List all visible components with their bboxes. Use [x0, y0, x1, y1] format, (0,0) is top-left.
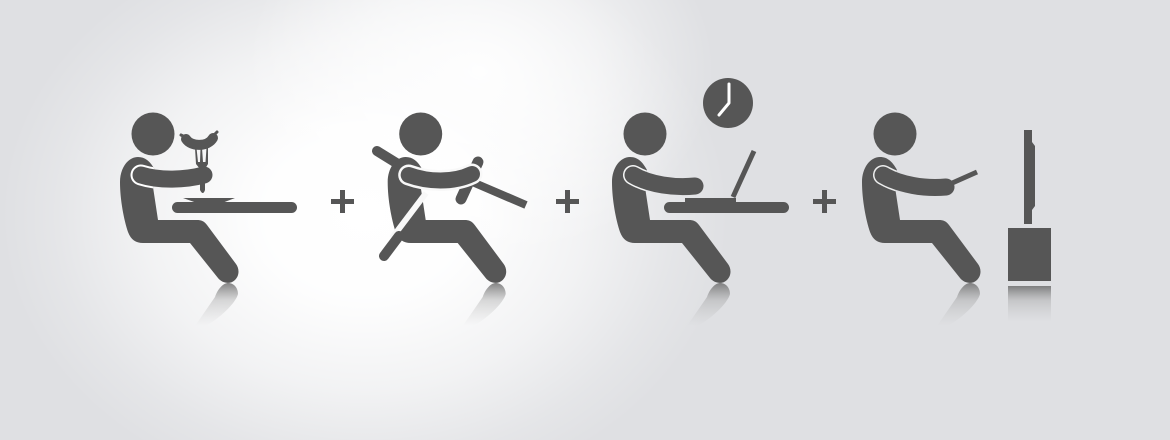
figure: watching tv	[862, 112, 1051, 326]
figure: seat belt	[377, 112, 526, 326]
arm	[633, 175, 695, 187]
head	[399, 112, 442, 156]
table with plate	[172, 198, 297, 213]
head	[132, 112, 174, 156]
body	[388, 157, 506, 283]
plus	[556, 190, 579, 213]
reflection	[687, 283, 730, 326]
head	[624, 112, 666, 156]
lower belt strap	[384, 236, 399, 256]
belt right strap	[470, 181, 526, 205]
table	[664, 202, 789, 213]
sausage	[181, 132, 217, 145]
reflection	[195, 283, 238, 326]
body	[120, 157, 238, 283]
remote	[950, 172, 977, 184]
plus	[813, 190, 836, 213]
belt upper strap	[377, 151, 398, 164]
figure: laptop work	[612, 78, 789, 326]
fork	[195, 148, 208, 193]
buckle	[461, 162, 478, 199]
clock	[703, 78, 753, 128]
tv stand	[1008, 228, 1051, 281]
arm	[141, 175, 204, 179]
arm	[883, 175, 946, 188]
tv	[1024, 130, 1035, 224]
body	[612, 157, 730, 283]
belt diagonal gap	[392, 193, 426, 238]
plus	[331, 190, 354, 213]
laptop	[685, 151, 754, 204]
figure: eating at table	[120, 112, 297, 326]
reflection	[937, 283, 980, 326]
reflection	[463, 283, 506, 326]
arm	[409, 174, 472, 180]
body	[862, 157, 980, 283]
stand reflection	[1008, 286, 1051, 322]
head	[874, 112, 916, 156]
